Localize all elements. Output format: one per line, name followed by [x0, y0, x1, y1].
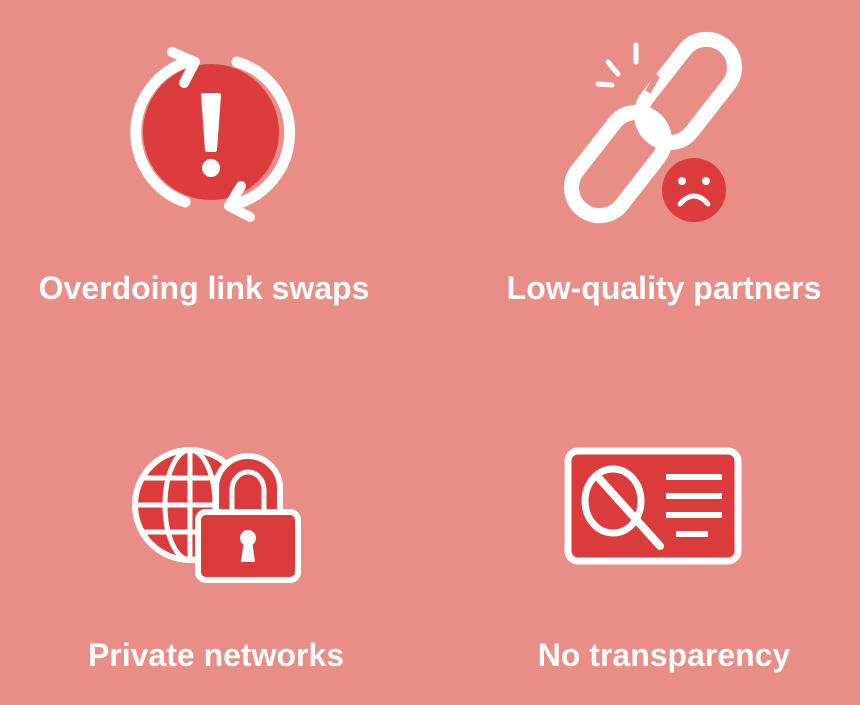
icon: broken chain with sad face: [560, 28, 746, 227]
icon: circular arrows with exclamation: [136, 52, 290, 217]
label: low-quality partners: Low-quality partners: [507, 270, 821, 306]
label: no transparency: No transparency: [538, 637, 790, 673]
icon: card with crossed magnifier: [568, 451, 738, 561]
label: private networks: Private networks: [88, 637, 344, 673]
icon: globe with lock: [135, 450, 298, 580]
label: overdoing link swaps: Overdoing link swaps: [39, 270, 369, 306]
